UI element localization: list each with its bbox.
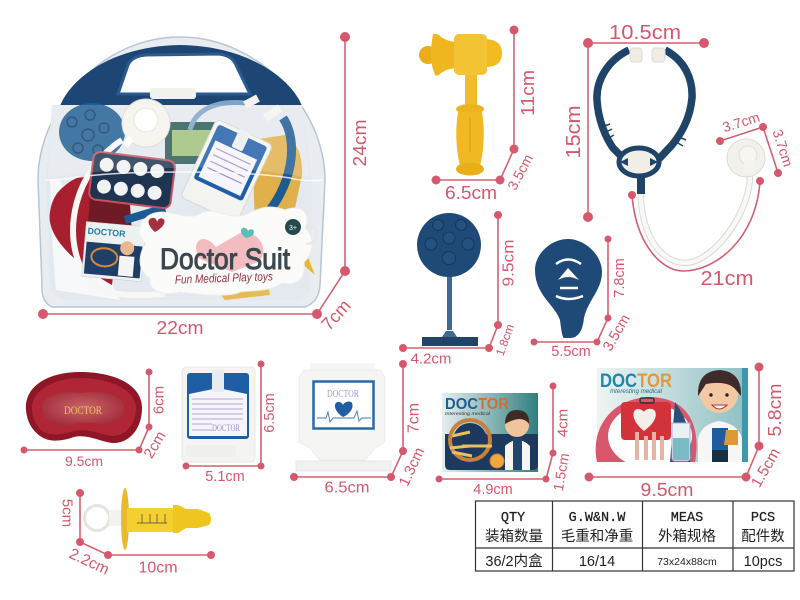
packing specification table: 毛重和净重 xyxy=(561,528,633,545)
large doctor card xyxy=(596,368,748,468)
packing specification table: 16/14 xyxy=(579,554,615,570)
blue tubes inside case xyxy=(73,98,292,295)
hammer dimensions: 6.5cm xyxy=(445,183,497,203)
stethoscope xyxy=(597,48,765,263)
packing specification table: 36/2内盒 xyxy=(485,553,543,570)
red basin inside case xyxy=(50,175,120,285)
monitor dimensions: 7cm xyxy=(406,403,422,433)
stethoscope dimensions: 10.5cm xyxy=(609,22,681,44)
stethoscope dimensions: 15cm xyxy=(563,106,585,158)
basin dimensions: 9.5cm xyxy=(65,453,103,469)
shield dimensions: 3.5cm xyxy=(600,312,634,354)
product sticker xyxy=(139,207,316,295)
large card dimensions xyxy=(584,362,785,500)
white chest piece inside case xyxy=(122,99,170,147)
packing specification table: 配件数 xyxy=(741,528,785,545)
red medical bag xyxy=(621,398,671,460)
shield dimensions: 5.5cm xyxy=(551,344,591,360)
shield dimensions: 7.8cm xyxy=(612,258,628,298)
age badge xyxy=(285,219,301,235)
hammer dimensions xyxy=(432,26,538,203)
translucent lid reflection xyxy=(48,105,310,178)
basin dimensions xyxy=(20,368,169,469)
stethoscope dimensions: 21cm xyxy=(700,268,754,290)
stethoscope dimensions xyxy=(563,22,796,290)
round knob dimensions: 9.5cm xyxy=(500,240,518,286)
small doctor card inside case xyxy=(82,222,146,282)
product sticker: 3+ xyxy=(289,225,297,232)
yellow hammer inside case xyxy=(252,135,302,225)
monitor dimensions xyxy=(290,360,428,496)
small doctor card: Interesting medical xyxy=(445,411,491,416)
stethoscope dimensions: 3.7cm xyxy=(770,127,796,169)
syringe dimensions: 10cm xyxy=(138,560,178,576)
stethoscope dimensions: 3.7cm xyxy=(720,109,762,135)
large card dimensions: 1.5cm xyxy=(748,445,784,491)
blue knob inside case xyxy=(59,103,125,161)
case dimensions: 22cm xyxy=(156,318,204,338)
clipboard dimensions: 6.5cm xyxy=(262,393,278,433)
packing specification table: MEAS xyxy=(671,511,703,526)
packing specification table: 10pcs xyxy=(744,554,782,570)
doctor character xyxy=(698,370,742,462)
heart monitor xyxy=(296,363,391,471)
round knob dimensions: 4.2cm xyxy=(411,350,451,368)
small doctor card xyxy=(442,393,538,472)
packing specification table xyxy=(475,501,794,571)
icon: teal heart xyxy=(241,228,254,238)
patient clipboard: DOCTOR xyxy=(212,423,240,433)
small card dimensions: 4.9cm xyxy=(473,482,513,498)
clipboard dimensions: 5.1cm xyxy=(205,469,245,485)
heart monitor: DOCTOR xyxy=(327,389,359,400)
syringe xyxy=(84,488,211,550)
small doctor card: DOCTOR xyxy=(445,396,509,413)
round knob dimensions xyxy=(399,211,518,368)
basin dimensions: 6cm xyxy=(150,386,168,414)
clipboard dimensions xyxy=(182,360,278,485)
sticker subtitle: Fun Medical Play toys xyxy=(175,269,273,287)
sticker title: Doctor Suit xyxy=(160,243,291,276)
case dimensions: 24cm xyxy=(350,120,370,166)
large doctor card: DOCTOR xyxy=(600,371,672,392)
small card dimensions: 1.5cm xyxy=(550,452,572,492)
chest piece xyxy=(727,139,765,177)
icon: red heart xyxy=(149,218,165,232)
shield chest piece xyxy=(535,239,602,338)
patient clipboard inside case xyxy=(180,118,273,223)
packing specification table: 装箱数量 xyxy=(485,528,543,545)
case dimensions xyxy=(38,32,370,338)
monitor dimensions: 6.5cm xyxy=(324,480,370,496)
packing specification table: QTY xyxy=(501,511,525,526)
teal inner card xyxy=(165,122,225,164)
patient clipboard xyxy=(182,367,255,462)
packing specification table: G.W&N.W xyxy=(569,511,626,526)
round knob dimensions: 1.8cm xyxy=(493,322,517,358)
doctor case product xyxy=(38,37,325,307)
small doctor card inside case: DOCTOR xyxy=(87,226,126,239)
shield dimensions xyxy=(530,236,634,360)
packing specification table: 73x24x88cm xyxy=(657,556,717,568)
packing specification table: PCS xyxy=(751,511,775,526)
small card dimensions: 4cm xyxy=(554,409,572,437)
packing specification table: 外箱规格 xyxy=(658,528,716,545)
monitor dimensions: 1.3cm xyxy=(396,445,428,489)
case dimensions: 7cm xyxy=(317,296,355,334)
navy eye chart panel xyxy=(88,151,176,209)
hammer xyxy=(419,34,502,175)
large card dimensions: 9.5cm xyxy=(640,480,694,500)
syringe dimensions xyxy=(58,489,215,579)
small card dimensions xyxy=(436,382,572,498)
syringe dimensions: 2.2cm xyxy=(66,545,112,579)
large card dimensions: 5.8cm xyxy=(765,384,785,436)
large doctor card: Interesting medical xyxy=(610,389,663,395)
hammer dimensions: 11cm xyxy=(518,70,538,116)
round knob tool xyxy=(417,213,481,346)
hammer dimensions: 3.5cm xyxy=(504,151,536,193)
basin dimensions: 2cm xyxy=(141,428,169,462)
ear tips xyxy=(630,48,642,62)
syringe dimensions: 5cm xyxy=(58,499,76,527)
kidney basin xyxy=(26,372,142,443)
beaker xyxy=(672,423,690,461)
basin logo: DOCTOR xyxy=(64,403,102,417)
